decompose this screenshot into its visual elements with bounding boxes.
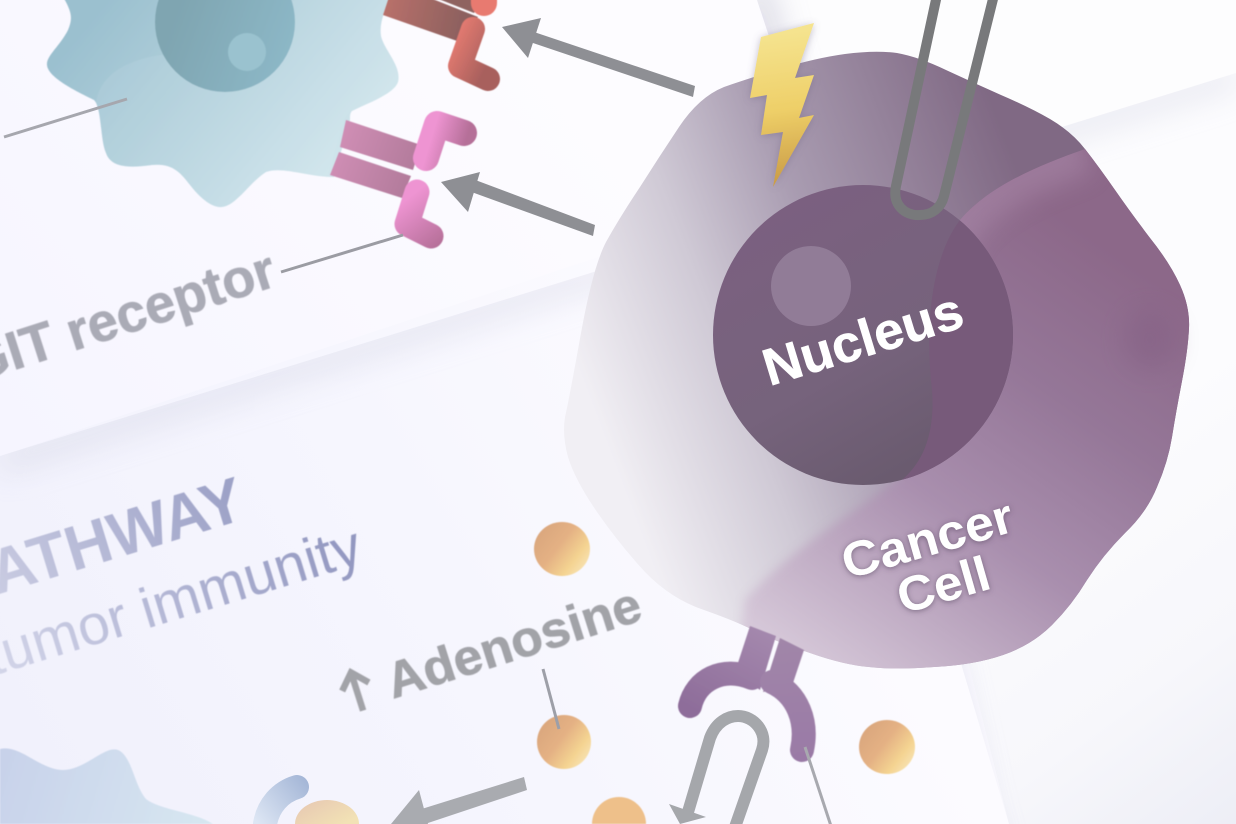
cancer cell xyxy=(564,52,1190,668)
inhibitor: gray U probe xyxy=(895,0,994,215)
receptor: blue xyxy=(265,787,297,824)
arrow: to pink receptor xyxy=(441,172,595,236)
leader line: purple receptor xyxy=(805,747,831,824)
cell: blue lower-left cell xyxy=(0,748,213,824)
arrow: to blue receptor xyxy=(391,777,527,824)
receptor: purple xyxy=(690,626,804,750)
panel: top left sheet xyxy=(11,76,1227,464)
label: Cancer Cell: Cell xyxy=(891,547,996,625)
leader line: adenosine xyxy=(543,669,559,729)
label: Cancer Cell xyxy=(836,489,1020,625)
label: Nucleus: Nucleus xyxy=(756,282,970,398)
receptor: pink xyxy=(330,120,464,236)
arrow: to red receptor xyxy=(502,18,695,97)
label: Cancer Cell: Cancer xyxy=(836,489,1020,590)
panel: right background sheet xyxy=(962,664,1236,824)
leader line: TIGIT receptor xyxy=(281,235,403,272)
leader line: teal cell xyxy=(4,99,127,137)
panel: top right background sheet xyxy=(757,0,790,35)
teal cell nucleolus xyxy=(228,33,266,71)
receptor: red xyxy=(383,0,488,79)
nucleus xyxy=(713,185,1013,485)
adenosine molecules xyxy=(534,522,915,824)
adenosine molecule: pale xyxy=(295,800,359,824)
nucleolus xyxy=(771,246,851,326)
teal cell nucleus xyxy=(155,0,295,92)
dark core spot xyxy=(1124,310,1176,370)
icon: lightning bolt xyxy=(750,23,814,187)
icon: up arrow xyxy=(338,668,376,715)
cell: teal immune cell xyxy=(47,0,399,207)
arrow: gray U arrow xyxy=(669,716,763,824)
label: up adenosine: Adenosine xyxy=(379,576,648,709)
